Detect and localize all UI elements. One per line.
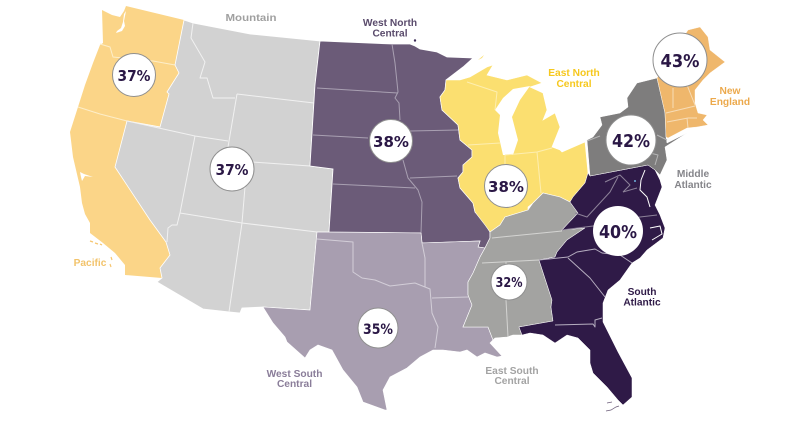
region: West North Central bbox=[310, 39, 490, 248]
label: West North Central: Central bbox=[372, 28, 408, 40]
percent bubble: Middle Atlantic bbox=[606, 115, 656, 165]
label: South Atlantic: Atlantic bbox=[623, 298, 661, 308]
Lake Michigan bbox=[495, 86, 530, 155]
region: East North Central bbox=[440, 55, 588, 232]
label: East South Central: East South bbox=[485, 366, 539, 377]
percent bubble: West South Central: 35% bbox=[363, 322, 393, 338]
label: New England: England bbox=[710, 97, 750, 108]
label: South Atlantic: South bbox=[628, 287, 656, 298]
percent bubble: West North Central: 38% bbox=[373, 133, 409, 151]
percent bubble: West South Central bbox=[358, 308, 398, 348]
percent bubble: Mountain: 37% bbox=[216, 161, 249, 179]
percent bubble: South Atlantic bbox=[593, 206, 643, 256]
label: West North Central: West North bbox=[363, 18, 417, 29]
label: Middle Atlantic: Middle bbox=[677, 169, 709, 180]
percent bubble: East South Central: 32% bbox=[496, 276, 522, 291]
percent bubble: East South Central bbox=[491, 264, 527, 300]
region: West South Central bbox=[263, 232, 502, 410]
percent bubble: South Atlantic: 40% bbox=[599, 223, 637, 243]
label: East South Central: Central bbox=[494, 376, 530, 387]
label: East North Central: Central bbox=[556, 79, 592, 90]
percent bubble: New England bbox=[653, 33, 707, 87]
percent bubble: East North Central: 38% bbox=[488, 178, 524, 196]
percent bubble: New England: 43% bbox=[660, 52, 700, 72]
label: Pacific: Pacific bbox=[74, 258, 107, 269]
percent bubble: Pacific: 37% bbox=[118, 67, 151, 85]
region: South Atlantic bbox=[519, 165, 665, 411]
percent bubble: West North Central bbox=[370, 120, 412, 162]
label: West South Central: Central bbox=[277, 379, 312, 390]
percent bubble: Pacific bbox=[112, 54, 156, 96]
label: Mountain: Mountain bbox=[226, 13, 276, 24]
label: Middle Atlantic: Atlantic bbox=[674, 180, 712, 191]
percent bubble: Mountain bbox=[210, 147, 254, 191]
map of US census regions bbox=[70, 6, 725, 411]
region: New England bbox=[657, 27, 725, 138]
region: Middle Atlantic bbox=[587, 78, 687, 176]
label: West South Central: West South bbox=[267, 369, 322, 380]
region: East South Central bbox=[463, 193, 585, 340]
label: New England: New bbox=[720, 86, 741, 97]
region: Mountain bbox=[115, 20, 333, 313]
label: East North Central: East North bbox=[548, 68, 600, 79]
percent bubble: East North Central bbox=[484, 164, 528, 208]
percent bubble: Middle Atlantic: 42% bbox=[612, 132, 650, 152]
region: Pacific bbox=[70, 6, 184, 278]
